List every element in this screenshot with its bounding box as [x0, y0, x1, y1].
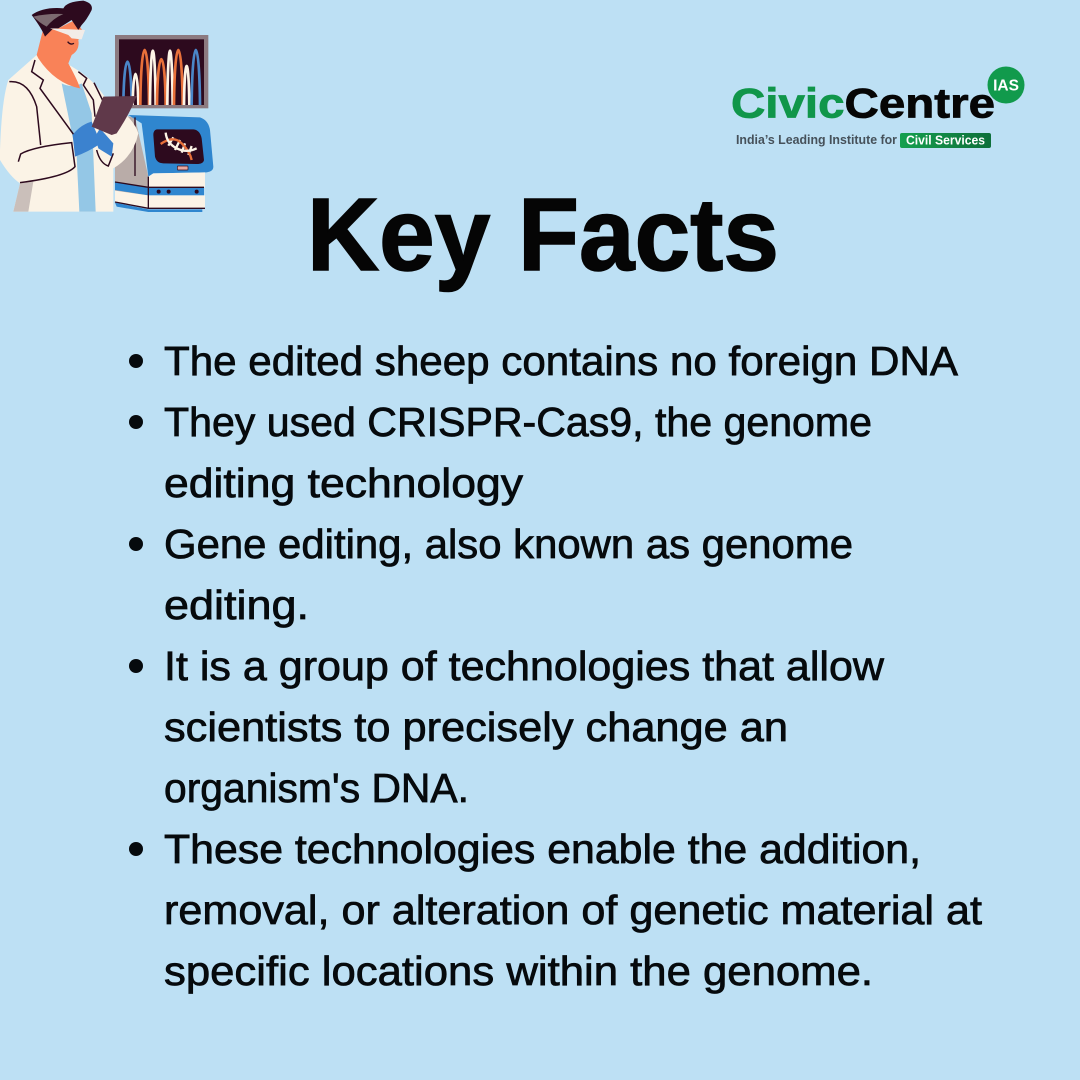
logo tag: Civil Services: Civil Services	[906, 134, 985, 148]
logo: CivicCentre IAS	[731, 66, 1024, 148]
coat lines	[9, 60, 113, 183]
gloves	[73, 122, 113, 157]
sequencer monitor with chromatogram	[115, 35, 208, 108]
bullet 2: They used CRISPR-Cas9, the genome	[164, 399, 872, 445]
bullet 3	[129, 521, 853, 628]
icon: scientist with DNA sequencer	[0, 1, 213, 212]
bullet 2: editing technology	[164, 460, 524, 506]
bullet 1: The edited sheep contains no foreign DNA	[164, 338, 958, 384]
coat shadow	[13, 182, 33, 212]
title: Key Facts	[307, 177, 779, 292]
lab coat	[0, 55, 138, 212]
bullet 4: It is a group of technologies that allow	[164, 643, 885, 689]
hair	[32, 1, 92, 37]
safety goggles	[50, 28, 85, 39]
bullet 4: organism's DNA.	[164, 765, 469, 811]
bullet 5: specific locations within the genome.	[164, 948, 873, 994]
bullet 5: removal, or alteration of genetic material at	[164, 887, 982, 933]
logo IAS badge	[988, 66, 1024, 104]
tablet	[92, 96, 137, 135]
bullet 5: These technologies enable the addition,	[164, 826, 921, 872]
bullet 2	[129, 399, 872, 506]
bullet list	[129, 338, 982, 994]
DNA helix	[161, 133, 197, 160]
bullet 3: editing.	[164, 582, 309, 628]
sequencer machine body	[115, 115, 213, 212]
bullet 5	[129, 826, 982, 994]
bullet 4: scientists to precisely change an	[164, 704, 788, 750]
bullet 3: Gene editing, also known as genome	[164, 521, 853, 567]
smile	[68, 42, 74, 44]
logo wordmark: Civic Centre	[731, 80, 995, 126]
inner shirt	[62, 83, 96, 212]
logo tagline: India’s Leading Institute for	[736, 133, 897, 147]
neck and face	[37, 20, 83, 88]
logo IAS badge: IAS	[993, 78, 1019, 94]
bullet 4	[129, 643, 885, 811]
